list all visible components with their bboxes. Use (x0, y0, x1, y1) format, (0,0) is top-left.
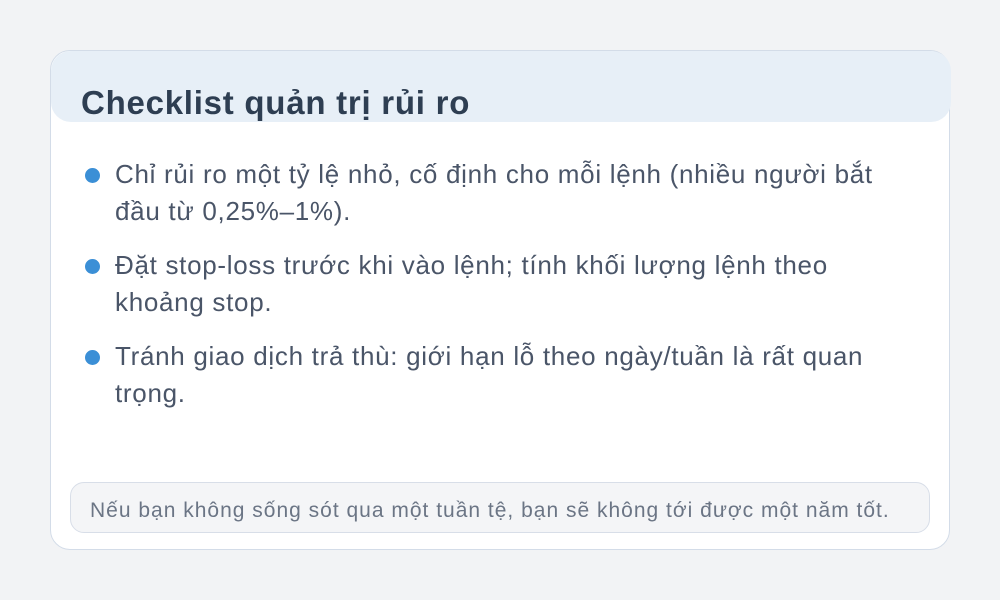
footer note: Nếu bạn không sống sót qua một tuần tệ, bạn sẽ không tới được một năm tốt. (90, 499, 890, 522)
item 3 (85, 341, 863, 408)
item 1: đầu từ 0,25%–1%). (115, 196, 351, 226)
header band (51, 51, 951, 122)
item 1 (85, 159, 873, 226)
footer note (70, 482, 930, 533)
item 2: Đặt stop-loss trước khi vào lệnh; tính khối lượng lệnh theo (115, 250, 828, 280)
title: Checklist quản trị rủi ro (81, 84, 470, 121)
item 2 (85, 250, 828, 317)
item 1: Chỉ rủi ro một tỷ lệ nhỏ, cố định cho mỗi lệnh (nhiều người bắt (115, 159, 873, 189)
item 3: trọng. (115, 378, 186, 408)
item 2: khoảng stop. (115, 287, 272, 317)
card (50, 50, 950, 550)
item 3: Tránh giao dịch trả thù: giới hạn lỗ theo ngày/tuần là rất quan (115, 341, 863, 371)
